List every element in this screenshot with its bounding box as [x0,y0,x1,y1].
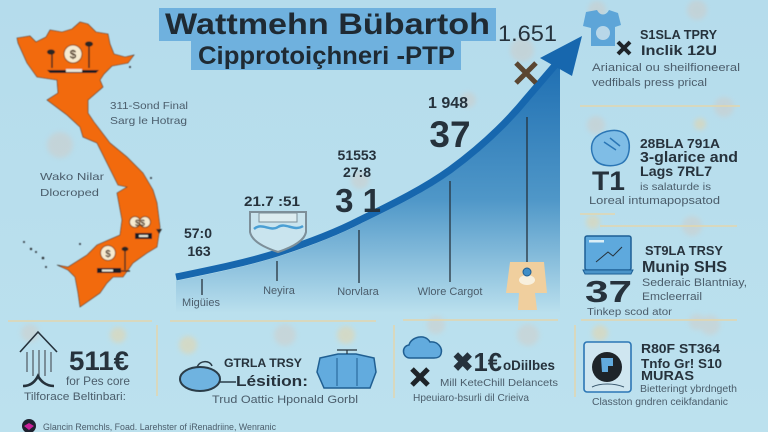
panel: bottom stat 1: 511€ [69,346,129,376]
panel: middle right: Lags 7RL7 [640,163,712,179]
data point 4 [428,95,471,155]
panel: bottom stat 2: Lésition: [236,373,308,390]
map marker: south coin: $ [105,249,111,260]
axis labels: Migüies [182,297,220,309]
icon: laptop chart [583,236,633,274]
title: Wattmehn Bübartoh [165,8,490,41]
panel: bottom stat 2 [180,350,376,406]
icon: globe scroll [584,342,631,392]
arrow head [540,36,582,76]
panel: lower right: Tinkep scod ator [587,307,673,318]
data point 3: 27:8 [343,164,371,180]
map label: central: Dlocroped [40,187,99,199]
panel: bottom stat 3: ✖1€ [452,347,502,377]
panel: lower right: ST9LA TRSY [645,243,723,258]
data point 3 [335,147,381,219]
panel: bottom stat 2: GTRLA TRSY [224,356,302,370]
data point 4: 37 [429,114,471,155]
panel: middle right: Loreal intumapopsatod [589,195,720,207]
map label: central: Wako Nilar [40,171,105,183]
panel: middle right: 3-glarice and [640,149,738,166]
icon: blue badge [592,130,629,166]
icon: pool [180,362,236,391]
panel: middle right: 28BLA 791A [640,136,721,151]
panel: bottom stat 3: oDiilbes [503,357,555,373]
panel: middle right: T1 [592,166,625,196]
map marker: north coin: $ [70,48,77,62]
icon: device [317,350,376,388]
panel: bottom stat 4: Bietteringt ybrdngeth [640,384,737,395]
panel: lower right: Emcleerrail [642,291,702,303]
icon: shirt [583,10,621,46]
map label: north: 311-Sond Final [110,100,188,112]
panel: middle right: is salaturde is [640,182,711,193]
panel: bottom stat 1 [20,332,130,403]
icon: house [20,332,57,386]
panel: middle right [589,130,738,207]
panel: bottom stat 2: Trud Oattic Hponald Gorbl [212,394,358,406]
panel: bottom stat 3 [403,337,558,404]
panel: bottom stat 1: Tilforace Beltinbari: [24,391,126,403]
panel: lower right: 37 [585,274,632,309]
data point 4: 1 948 [428,95,468,112]
data point 2: 21.7 :51 [244,193,300,209]
panel: lower right: Munip SHS [642,259,727,276]
title: Cipprotoiçhneri -PTP [198,42,455,70]
panel: top right: vedfibals press prical [592,77,707,89]
panel: bottom stat 3: Hpeuiaro-bsurli dil Crieiva [413,392,529,404]
panel: top right [583,10,740,89]
shield icon [250,212,306,252]
pedestal icon [506,262,547,310]
panel: bottom stat 4: Classton gndren ceikfandanic [592,397,728,408]
map marker: north coin [47,41,99,73]
title [159,8,496,70]
map marker: central coins: $$ [135,218,145,228]
panel: bottom stat 4: R80F ST364 [641,341,721,356]
axis labels [182,285,482,309]
panel: bottom stat 3: Mill KeteChill Delancets [440,377,558,389]
panel: top right: S1SLA TPRY [640,27,717,42]
map label: north [110,100,188,127]
panel: lower right [583,236,747,318]
axis labels: Norvlara [337,286,380,298]
data point 3: 3 1 [335,182,381,219]
panel: bottom stat 1: for Pes core [66,374,130,388]
footer source [22,419,276,432]
data point 3: 51553 [338,147,377,163]
data point 5 [498,21,557,83]
axis labels: Wlore Cargot [418,286,482,298]
icon: cloud [403,337,441,358]
data point 1: 163 [187,243,211,259]
panel: top right: Inclik 12U [641,42,717,58]
panel: bottom stat 4: MURAS [641,368,694,383]
panel: bottom stat 4 [584,341,737,408]
axis labels: Neyira [263,285,296,297]
map marker: south coin [97,246,130,273]
map marker: central coins [130,216,162,239]
map label: north: Sarg le Hotrag [110,115,187,127]
data point 1: 57:0 [184,225,212,241]
panel: lower right: Sederaic Blantniay, [642,277,747,289]
data point 5: 1.651 [498,21,557,46]
panel: top right: Arianical ou sheilfioneeral [592,62,740,74]
data point 1 [184,225,212,259]
panel: bottom stat 4: Tnfo Gr! S10 [641,356,722,371]
map label: central [40,171,105,199]
growth area chart [176,36,582,312]
map of Vietnam [17,22,162,307]
